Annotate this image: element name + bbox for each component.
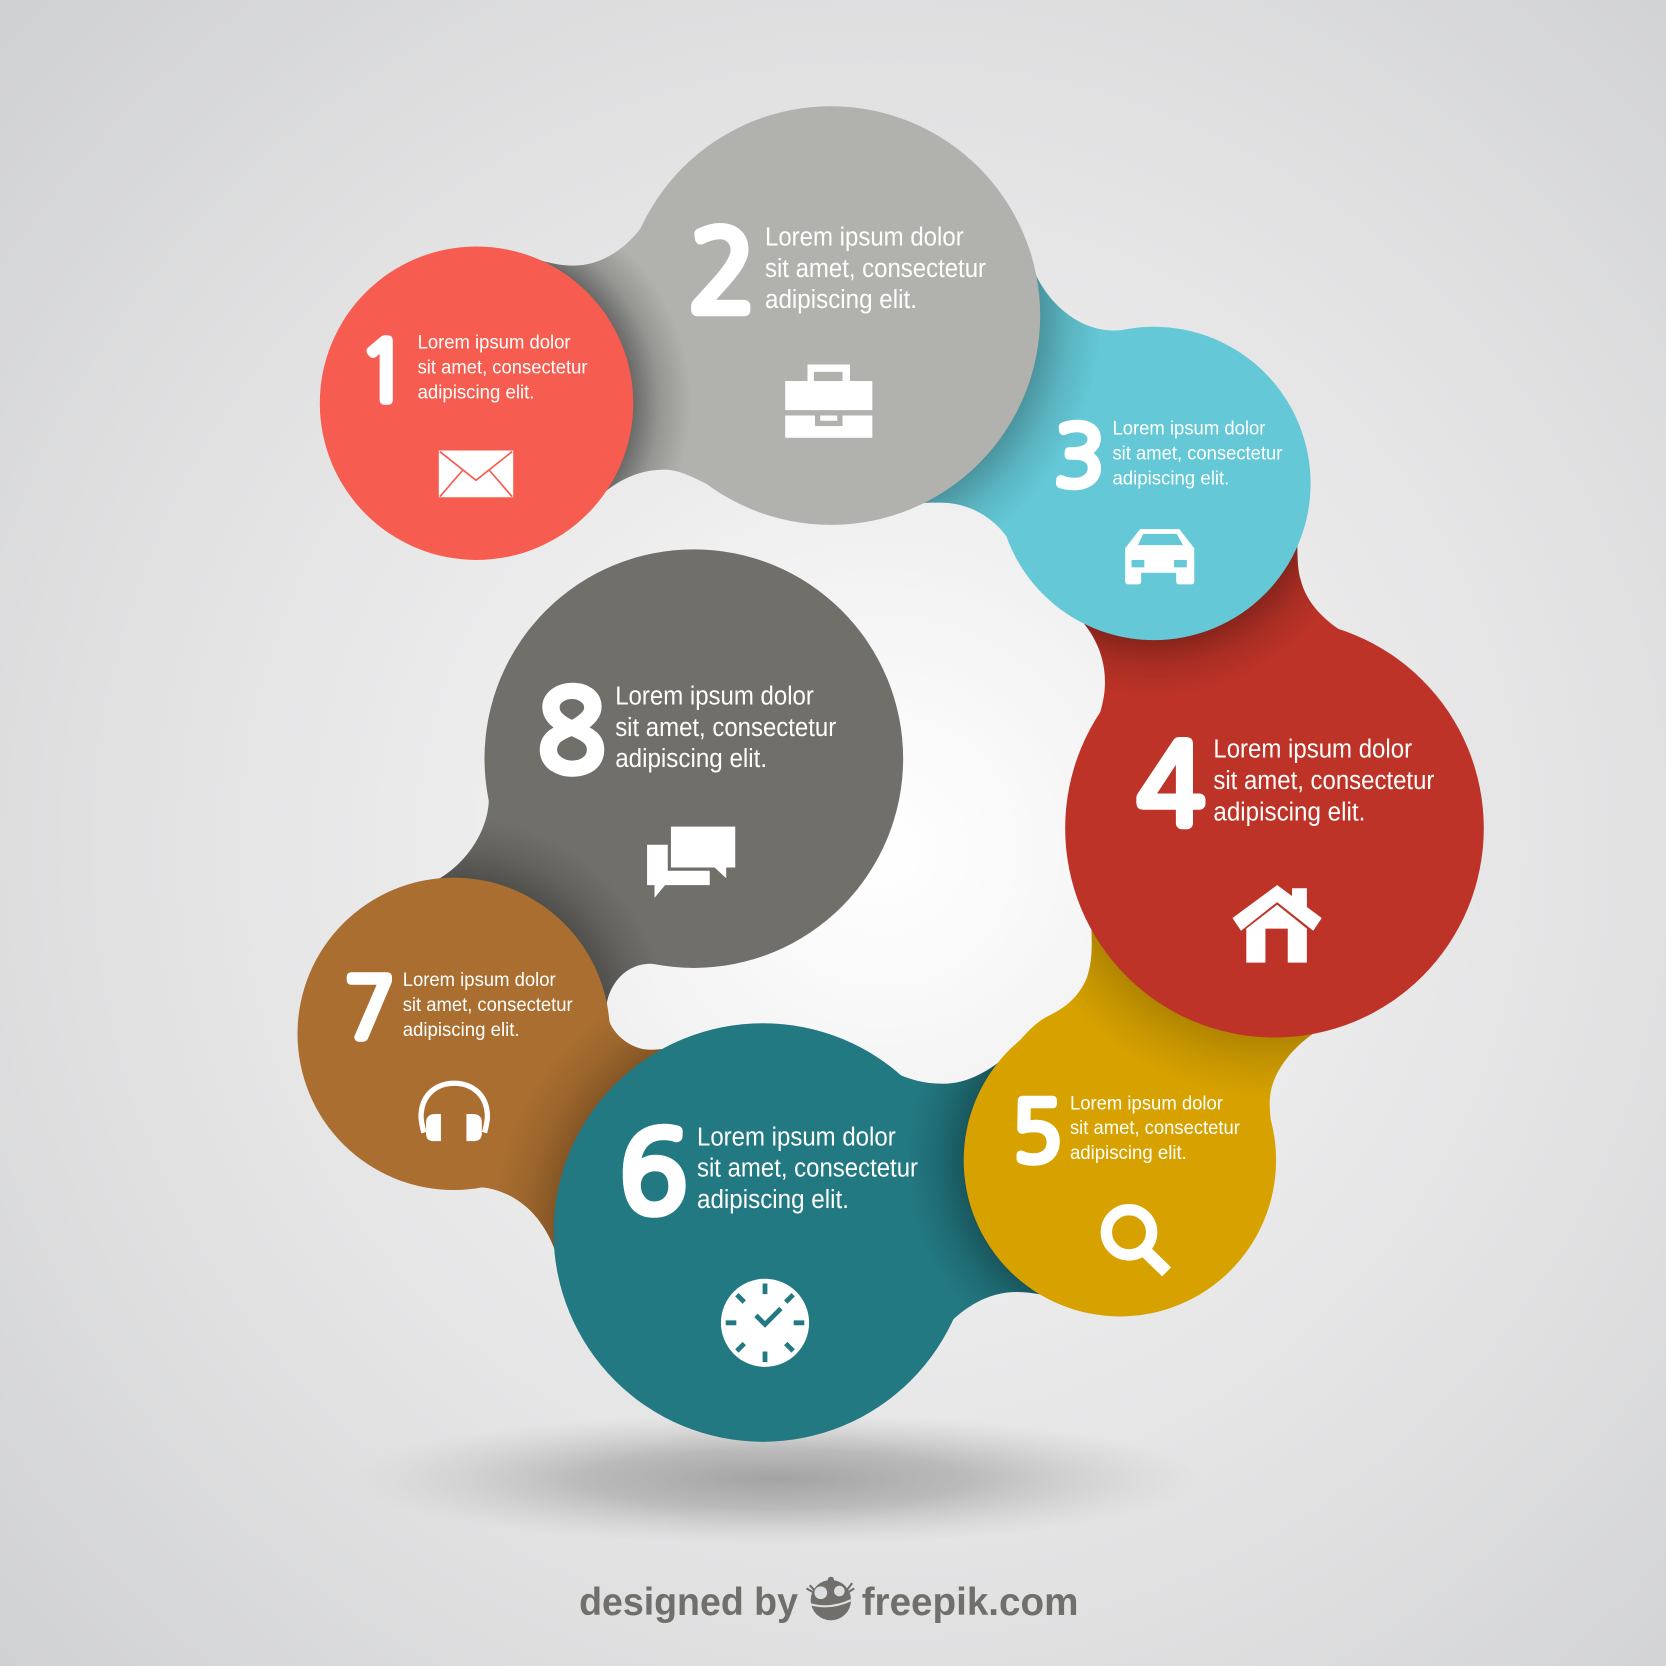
- panel: step 7: [298, 878, 662, 1249]
- panel: step 3: [924, 275, 1311, 640]
- panel: step 6: [554, 1023, 1040, 1442]
- number 2: 2: [689, 216, 756, 327]
- number 1: 1: [358, 330, 409, 413]
- footer credit: [579, 1577, 1078, 1624]
- number 5: 5: [1012, 1090, 1062, 1173]
- text block 2: sit amet, consectetur: [765, 255, 986, 283]
- number 4: 4: [1137, 729, 1204, 840]
- text block 1: Lorem ipsum dolor: [418, 332, 571, 354]
- number 6: 6: [620, 1117, 687, 1228]
- footer credit: freepik.com: [862, 1580, 1078, 1624]
- text block 6: adipiscing elit.: [697, 1186, 849, 1214]
- text block 8: Lorem ipsum dolor: [615, 682, 814, 710]
- text block 8: sit amet, consectetur: [615, 714, 837, 742]
- icon: briefcase: [785, 364, 872, 438]
- text block 1: sit amet, consectetur: [418, 356, 588, 378]
- text block 5: sit amet, consectetur: [1070, 1117, 1240, 1139]
- panel: step 2: [542, 106, 1040, 525]
- text block 3: adipiscing elit.: [1112, 468, 1229, 490]
- icon: headphones: [421, 1083, 487, 1141]
- icon: chat bubbles: [647, 826, 735, 898]
- text block 3: Lorem ipsum dolor: [1112, 418, 1266, 440]
- text block 8: adipiscing elit.: [615, 745, 767, 773]
- icon: car: [1125, 529, 1194, 584]
- text block 4: Lorem ipsum dolor: [1213, 736, 1413, 764]
- text block 4: sit amet, consectetur: [1213, 767, 1435, 795]
- number 3: 3: [1054, 415, 1105, 498]
- panel: step 4: [1065, 546, 1484, 1038]
- text block 6: Lorem ipsum dolor: [697, 1123, 896, 1151]
- panel: step 8: [440, 549, 904, 1004]
- ground shadow: [351, 1413, 1201, 1545]
- text block 1: adipiscing elit.: [418, 381, 534, 403]
- footer credit: designed by: [579, 1580, 798, 1624]
- text block 2: Lorem ipsum dolor: [765, 223, 964, 251]
- icon: clock: [721, 1279, 809, 1367]
- text block 5: Lorem ipsum dolor: [1070, 1092, 1223, 1114]
- number 8: 8: [538, 676, 605, 787]
- text block 7: Lorem ipsum dolor: [403, 969, 556, 991]
- icon: freepik robot: [806, 1577, 854, 1620]
- text block 2: adipiscing elit.: [765, 286, 917, 314]
- panel: step 1: [320, 246, 633, 560]
- text block 3: sit amet, consectetur: [1112, 443, 1283, 465]
- text block 7: adipiscing elit.: [403, 1019, 520, 1041]
- icon: house: [1232, 885, 1322, 963]
- text block 7: sit amet, consectetur: [403, 994, 573, 1016]
- icon: envelope: [439, 450, 513, 497]
- text block 4: adipiscing elit.: [1213, 798, 1365, 826]
- icon: magnifier: [1106, 1210, 1167, 1272]
- panel: step 5: [964, 929, 1314, 1316]
- text block 6: sit amet, consectetur: [697, 1155, 918, 1183]
- text block 5: adipiscing elit.: [1070, 1142, 1187, 1164]
- number 7: 7: [345, 967, 395, 1050]
